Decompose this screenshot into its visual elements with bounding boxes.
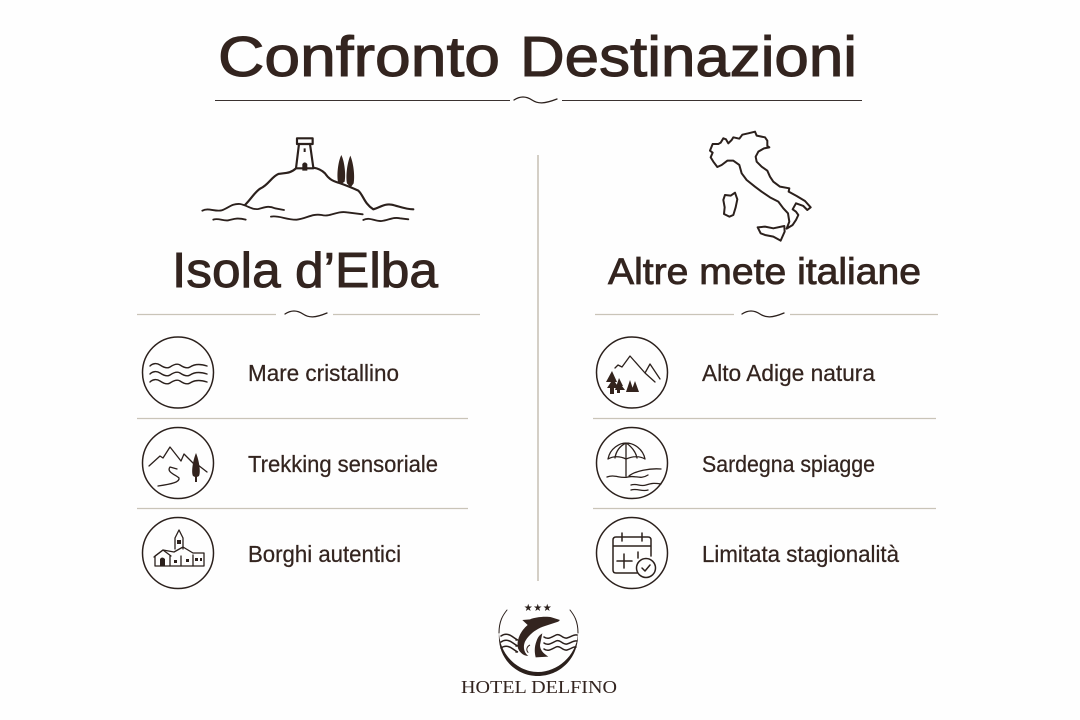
hotel name: HOTEL DELFINO — [461, 677, 617, 697]
panel: Altre mete italiane — [593, 132, 938, 588]
panel: Isola d'Elba — [137, 138, 480, 589]
title: Confronto — [218, 25, 500, 89]
icon: island with tower — [202, 138, 413, 221]
icon: calendar with check — [596, 518, 668, 588]
emblem ring — [499, 633, 578, 676]
item: Trekking sensoriale — [142, 428, 438, 498]
title divider — [215, 97, 862, 103]
item: Limitata stagionalità: Limitata stagionalità — [702, 541, 899, 567]
item: Trekking sensoriale: Trekking sensoriale — [248, 451, 438, 477]
item: Mare cristallino — [142, 337, 399, 408]
title — [218, 25, 857, 89]
item: Borghi autentici: Borghi autentici — [248, 541, 401, 567]
heading: Isola d'Elba: Isola d’Elba — [172, 244, 439, 298]
icon: mountains and pines — [596, 337, 668, 408]
icon: beach umbrella — [596, 428, 668, 498]
item: Alto Adige natura — [596, 337, 875, 408]
logo: Hotel Delfino — [461, 603, 617, 697]
item: Mare cristallino: Mare cristallino — [248, 360, 399, 386]
icon: mountain trail and cypress — [142, 428, 214, 498]
heading: Altre mete italiane: Altre mete italiane — [608, 251, 921, 292]
item: Sardegna spiagge: Sardegna spiagge — [702, 451, 875, 477]
item: Limitata stagionalità — [596, 518, 899, 588]
title: Destinazioni — [520, 25, 857, 89]
item: Borghi autentici — [142, 518, 401, 588]
stars: ★★★ — [524, 603, 552, 614]
item: Sardegna spiagge — [596, 428, 875, 498]
heading divider — [137, 311, 480, 317]
item: Alto Adige natura: Alto Adige natura — [702, 360, 875, 386]
icon: waves — [142, 337, 214, 408]
icon: village — [142, 518, 214, 588]
icon: map of Italy — [710, 132, 811, 241]
heading divider — [595, 311, 938, 317]
dolphin — [518, 617, 560, 657]
waves — [501, 634, 577, 652]
